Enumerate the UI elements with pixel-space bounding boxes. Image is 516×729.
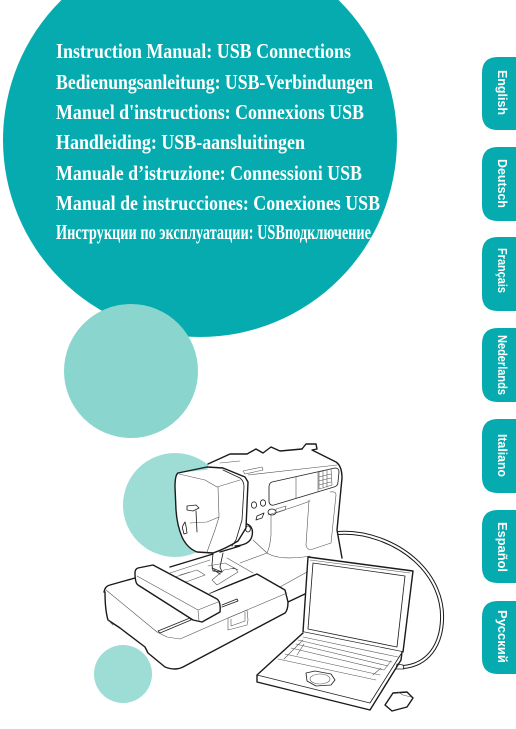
title block: Bedienungsanleitung: USB-Verbindungen [56, 70, 373, 94]
illustration: mouse [385, 692, 413, 711]
illustration: sewing machine body [170, 444, 342, 602]
tab: English [482, 57, 516, 130]
illustration: presser foot and needle plate [170, 553, 253, 593]
tab: Deutsch: Deutsch [495, 159, 509, 208]
laptop touchpad [306, 671, 335, 686]
tab: Español [482, 510, 516, 583]
tab: Italiano [482, 419, 516, 493]
illustration: sewing machine head [175, 467, 252, 553]
control panel display [269, 468, 339, 505]
tab: Nederlands: Nederlands [495, 335, 509, 395]
illustration: laptop computer [257, 557, 413, 710]
title block: Manuel d'instructions: Connexions USB [56, 100, 364, 124]
decorative circle: small [94, 645, 152, 703]
laptop base [257, 632, 403, 710]
tab: Nederlands [482, 328, 516, 402]
illustration: USB cable [338, 533, 442, 667]
tab: Español: Español [495, 522, 509, 572]
tab: Русский [482, 601, 516, 674]
tab: Français [482, 237, 516, 311]
decorative circle: medium [64, 304, 198, 438]
tab: Français: Français [495, 248, 509, 293]
title block [56, 39, 380, 244]
tab: English: English [495, 70, 509, 115]
tab: Русский: Русский [495, 610, 509, 663]
control buttons [251, 500, 286, 520]
illustration: embroidery carriage arm [135, 565, 220, 622]
illustration: embroidery unit [104, 570, 288, 669]
large teal title circle [3, 0, 397, 337]
tab: Italiano: Italiano [495, 434, 509, 477]
title block: Manual de instrucciones: Conexiones USB [56, 191, 380, 215]
title block: Handleiding: USB-aansluitingen [56, 130, 305, 154]
decorative circle: behind machine [123, 453, 227, 557]
title block: Инструкции по эксплуатации: USBподключение [56, 220, 371, 244]
tab: Deutsch [482, 147, 516, 221]
laptop screen [303, 557, 413, 652]
title block: Manuale d’istruzione: Connessioni USB [56, 161, 362, 185]
language tabs [482, 57, 516, 674]
USB plug [396, 664, 404, 669]
title block: Instruction Manual: USB Connections [56, 39, 351, 63]
